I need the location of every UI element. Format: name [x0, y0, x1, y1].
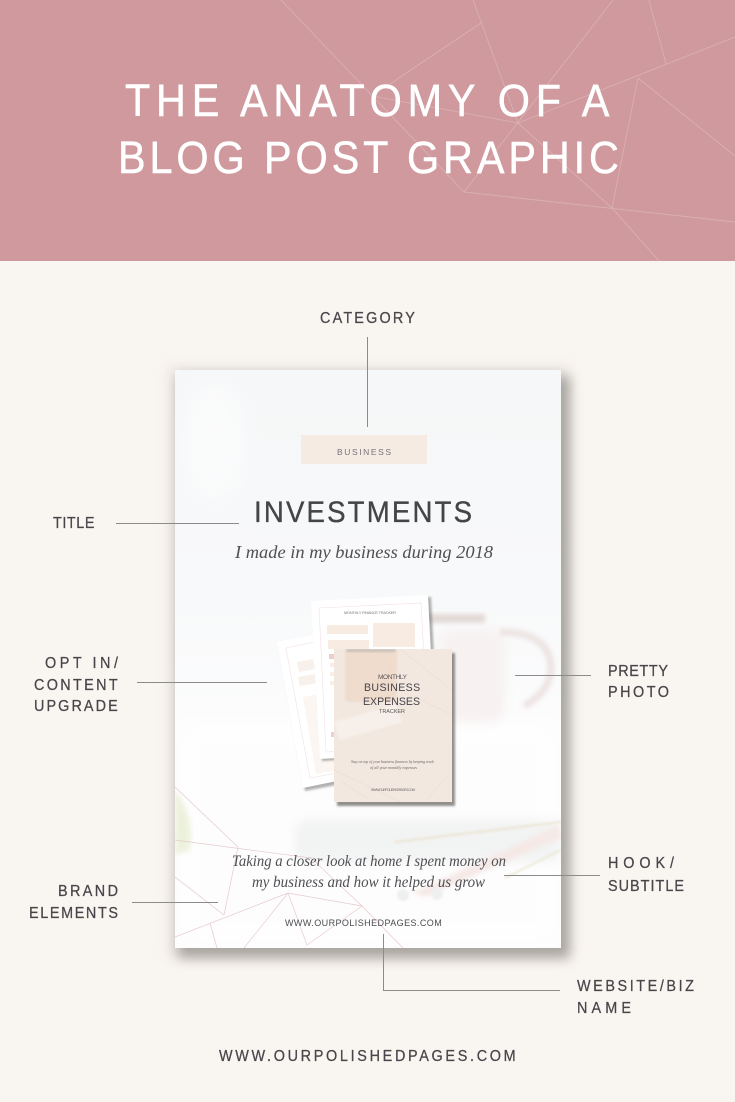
label: opt in content upgrade: UPGRADE	[34, 698, 118, 715]
leader lines	[116, 337, 600, 990]
pretty photo background	[175, 604, 561, 910]
title: BLOG POST GRAPHIC	[118, 133, 619, 183]
label: hook subtitle	[608, 855, 684, 895]
worksheet right	[311, 595, 439, 761]
tracker cover: Stay on top of your business finances by keeping track	[351, 759, 434, 764]
label: hook subtitle: SUBTITLE	[608, 878, 684, 895]
tracker cover: of all your monthly expenses	[370, 765, 417, 770]
label: brand elements: ELEMENTS	[29, 905, 118, 922]
label: website biz name: NAME	[577, 1000, 631, 1017]
footer url: WWW.OURPOLISHEDPAGES.COM	[219, 1048, 516, 1065]
hook text: Taking a closer look at home I spent money on	[232, 853, 506, 870]
tracker cover: TRACKER	[379, 709, 405, 715]
worksheet left	[286, 642, 334, 792]
label: pretty photo: PHOTO	[608, 684, 669, 701]
label: brand elements: BRAND	[58, 883, 118, 900]
category tag: BUSINESS	[337, 447, 391, 457]
post subtitle: I made in my business during 2018	[234, 542, 493, 562]
category tag	[301, 435, 427, 464]
tracker cover: MONTHLY	[378, 674, 408, 681]
label: title: TITLE	[53, 515, 94, 532]
tracker cover	[334, 649, 452, 802]
card shadow	[168, 366, 570, 958]
label: hook subtitle: HOOK/	[608, 855, 675, 872]
brand elements: geometric lines	[175, 787, 403, 948]
label: brand elements	[29, 883, 118, 922]
tracker cover: WWW.OURPOLISHEDPAGES.COM	[371, 788, 415, 792]
tracker cover: EXPENSES	[363, 696, 420, 708]
label: website biz name: WEBSITE/BIZ	[577, 978, 694, 995]
title: THE ANATOMY OF A	[125, 76, 610, 126]
label: opt in content upgrade: OPT IN/	[45, 655, 119, 672]
label: website biz name	[577, 978, 694, 1017]
label: category: CATEGORY	[320, 310, 415, 327]
cover shadow	[337, 653, 455, 806]
tracker cover: BUSINESS	[364, 682, 420, 694]
hook text: my business and how it helped us grow	[252, 874, 485, 891]
label: opt in content upgrade	[34, 655, 119, 715]
label: pretty photo: PRETTY	[608, 663, 668, 680]
header banner	[0, 0, 735, 261]
worksheet right: MONTHLY FINANCE TRACKER	[344, 611, 396, 615]
hook text	[232, 853, 506, 891]
website on card: WWW.OURPOLISHEDPAGES.COM	[285, 918, 442, 928]
label: pretty photo	[608, 663, 669, 701]
opt in mockup	[277, 595, 455, 806]
title	[118, 76, 619, 183]
panel: blog post graphic	[175, 370, 561, 948]
label: opt in content upgrade: CONTENT	[34, 677, 118, 694]
post title: INVESTMENTS	[254, 496, 472, 529]
